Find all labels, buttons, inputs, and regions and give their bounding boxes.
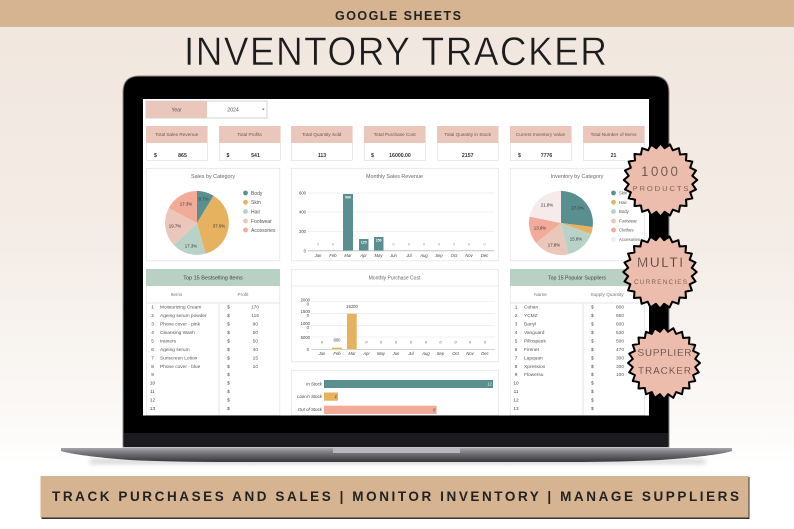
zero labels: 0: [392, 242, 395, 246]
year selector: [146, 101, 267, 118]
month labels: Apr: [362, 351, 370, 356]
legend: inventory: Clothes: [619, 228, 634, 233]
pie chart: sales: [165, 191, 229, 255]
dollar column: $: [591, 372, 594, 378]
month labels: Feb: [333, 351, 341, 356]
panel: inventory by category: [510, 168, 644, 261]
card: total quantity in stock: Total Quantity in Stock: [444, 132, 492, 137]
row numbers: 1: [515, 305, 518, 310]
legend: sales: Hair: [251, 209, 261, 215]
dollar column: $: [227, 364, 230, 370]
zero labels: 0: [321, 340, 324, 344]
row numbers: 3: [151, 322, 154, 327]
zero labels: 0: [410, 340, 413, 344]
legend: inventory: Footwear: [619, 219, 637, 224]
top banner: Google Sheets: GOOGLE SHEETS: [335, 9, 461, 23]
dollar column: $: [227, 330, 230, 336]
legend: inventory: [611, 191, 640, 242]
y axis labels: 600: [299, 190, 307, 196]
panel: stock status bar chart: In Stock: [306, 382, 323, 386]
zero labels: 0: [408, 242, 411, 246]
card: current inventory value: $: [518, 153, 521, 159]
pie chart: sales: 37.0%: [213, 224, 225, 228]
month labels: Oct: [452, 351, 460, 356]
y axis labels: 0: [307, 302, 310, 307]
month labels: Apr: [359, 253, 367, 258]
month labels: Mar: [348, 351, 356, 356]
dollar column: $: [227, 338, 230, 344]
zero labels: 0: [332, 242, 335, 246]
supplier names: Cuhan: [524, 305, 538, 311]
item names: Moisturizing Cream: [160, 305, 201, 311]
KPI cards: [146, 126, 644, 160]
profit values: 170: [251, 305, 259, 311]
row numbers: [150, 305, 155, 411]
zero labels: [321, 340, 487, 344]
row numbers: 6: [151, 347, 154, 352]
legend: inventory: Accesories: [619, 237, 640, 242]
panel: monthly sales revenue: [291, 168, 498, 261]
row numbers: 9: [515, 372, 518, 377]
supplier names: Vanguard: [524, 330, 545, 336]
legend: sales: Skin: [251, 200, 261, 206]
month labels: Jun: [392, 351, 400, 356]
panel: stock status bar chart: Low in Stock: [297, 394, 323, 399]
supplier names: Lapquan: [524, 355, 543, 361]
row numbers: 2: [515, 313, 518, 318]
month labels: Sep: [437, 351, 445, 356]
pie chart: inventory: 21.8%: [541, 202, 553, 208]
card: total sales revenue: Total Sales Revenue: [155, 132, 199, 137]
profit values: [251, 305, 259, 370]
supplier names: Banyl: [524, 322, 536, 328]
month labels: [318, 351, 490, 356]
profit values: 40: [253, 347, 258, 353]
row numbers: 4: [515, 330, 518, 335]
quantity values: 650: [616, 313, 624, 319]
laptop shadow: [90, 459, 705, 464]
row numbers: 6: [515, 347, 518, 352]
dollar column: $: [591, 347, 594, 353]
card: total purchase cost: $: [371, 153, 374, 159]
dollar column: $: [227, 372, 230, 378]
card: current inventory value: Current Inventory Value: [516, 132, 565, 137]
badge: multi currencies: MULTI: [637, 255, 683, 270]
table: top 15 popular suppliers: Supply Quantity: [590, 292, 624, 297]
zero labels: 0: [484, 340, 487, 344]
bars: monthly sales: 590: [345, 196, 351, 200]
dollar column: $: [227, 347, 230, 353]
dollar column: $: [591, 338, 594, 344]
laptop chin: [124, 433, 668, 447]
zero labels: 0: [365, 340, 368, 344]
row numbers: 4: [151, 330, 154, 335]
supplier names: Flowersu: [524, 372, 544, 378]
badge: 1000 products: 1000: [641, 164, 678, 179]
dollar column: $: [591, 381, 594, 387]
panel: monthly sales revenue: Monthly Sales Revenue: [366, 174, 423, 180]
table: top 15 bestselling items: Top 15 Bestselling Items: [183, 276, 243, 282]
card: total number of items: 21: [611, 153, 616, 159]
quantity values: 530: [616, 330, 624, 336]
row numbers: 13: [150, 406, 155, 411]
table: top 15 bestselling items: Profit: [238, 292, 249, 297]
supplier names: Pillospeek: [524, 338, 546, 344]
zero labels: 0: [438, 242, 441, 246]
y axis labels: [299, 190, 307, 253]
card: total sales revenue: $: [154, 153, 157, 159]
dollar column: [591, 305, 594, 412]
table: top 15 bestselling items: Items: [171, 292, 183, 297]
item names: trainers: [160, 338, 177, 344]
pie chart: inventory: 27.0%: [571, 206, 584, 210]
dollar column: $: [227, 389, 230, 395]
item names: Ageing serum: [160, 347, 190, 353]
item names: Phone cover - pink: [160, 322, 201, 328]
dollar column: $: [591, 305, 594, 311]
dollar column: $: [227, 398, 230, 404]
panel: monthly purchase cost: [291, 269, 498, 362]
card: total quantity in stock: [437, 126, 498, 160]
card: total number of items: [583, 126, 644, 160]
profit values: 90: [253, 322, 258, 328]
quantity values: 500: [616, 338, 624, 344]
zero labels: [317, 242, 486, 246]
row numbers: 8: [515, 364, 518, 369]
pie chart: sales: 19.7%: [169, 224, 181, 228]
dollar column: $: [591, 398, 594, 404]
dashboard screen: [143, 99, 649, 416]
row numbers: 9: [151, 372, 154, 377]
y axis labels: 5000: [301, 335, 311, 340]
dollar column: $: [227, 355, 230, 361]
dollar column: $: [227, 381, 230, 387]
quantity values: 600: [616, 322, 624, 328]
y axis labels: 0: [307, 325, 310, 330]
card: total sales revenue: [146, 126, 208, 160]
row numbers: 11: [514, 389, 519, 394]
dollar column: $: [227, 305, 230, 311]
supplier names: [524, 305, 546, 378]
item names: Phone cover - blue: [160, 364, 201, 370]
row numbers: 3: [515, 322, 518, 327]
card: total purchase cost: 16000.00: [389, 153, 411, 159]
y axis labels: 0: [304, 248, 307, 253]
panel: stock status bar chart: Out of Stock: [298, 407, 323, 412]
pie chart: sales: 8.7%: [198, 196, 209, 202]
zero labels: 0: [454, 340, 457, 344]
table: top 15 popular suppliers: [510, 269, 644, 415]
legend: sales: Footwear: [251, 219, 272, 225]
panel: sales by category: [146, 168, 280, 261]
title: INVENTORY TRACKER: [184, 30, 607, 74]
dollar column: $: [591, 355, 594, 361]
table: top 15 popular suppliers: Top 15 Popular Suppliers: [548, 276, 606, 282]
month labels: Jun: [389, 253, 398, 258]
card: total number of items: Total Number of Items: [591, 132, 637, 137]
card: total sales revenue: 865: [178, 153, 187, 159]
badge: supplier tracker: SUPPLIER: [638, 348, 692, 359]
laptop lid: [123, 76, 669, 447]
pie chart: inventory: 15.8%: [570, 236, 582, 242]
card: total quantity sold: 113: [318, 153, 326, 159]
bars: monthly sales: 125: [361, 240, 367, 244]
pie chart: sales: 17.3%: [180, 202, 192, 206]
row numbers: 11: [150, 389, 155, 394]
legend: sales: [243, 191, 276, 234]
table: top 15 bestselling items: [146, 269, 280, 415]
row numbers: 7: [151, 355, 154, 360]
row numbers: 10: [513, 381, 519, 386]
profit values: 50: [253, 338, 258, 344]
dollar column: $: [591, 364, 594, 370]
month labels: Jul: [405, 253, 413, 258]
item names: Ageing serum powder: [160, 313, 207, 319]
bottom banner: features: TRACK PURCHASES AND SALES | MONITOR INVENTORY | MANAGE SUPPLIERS: [52, 489, 739, 504]
row numbers: 2: [151, 313, 154, 318]
year selector: Year: [171, 107, 182, 113]
month labels: Dec: [481, 351, 490, 356]
card: current inventory value: 7776: [541, 153, 552, 159]
card: total profits: [219, 126, 280, 160]
year selector: 2024: [227, 107, 239, 113]
panel: stock status bar chart: [291, 370, 498, 415]
laptop: [61, 76, 732, 464]
panel: stock status bar chart: 8: [433, 408, 436, 412]
card: total quantity sold: Total Quantity Sold: [302, 132, 342, 137]
quantity values: 100: [616, 372, 624, 378]
dollar column: $: [227, 406, 230, 412]
y axis labels: 1000: [301, 321, 311, 326]
zero labels: 0: [469, 340, 472, 344]
quantity values: [616, 305, 624, 378]
card: total profits: $: [227, 153, 230, 159]
zero labels: 0: [380, 340, 383, 344]
month labels: Jan: [318, 351, 326, 356]
y axis labels: 0: [307, 313, 310, 318]
laptop notch: [333, 448, 460, 453]
panel: stock status bar chart: 1: [335, 394, 337, 399]
quantity values: 800: [616, 305, 624, 311]
top banner: Google Sheets: [0, 0, 794, 27]
badge: 1000 products: [624, 143, 697, 217]
dollar column: $: [591, 389, 594, 395]
profit values: 116: [251, 313, 259, 319]
panel: sales by category: Sales by Category: [191, 174, 235, 180]
row numbers: 5: [515, 338, 518, 344]
month labels: May: [375, 253, 383, 258]
pie chart: sales: 17.3%: [185, 244, 197, 248]
zero labels: 0: [425, 340, 428, 344]
badge: supplier tracker: TRACKER: [638, 366, 691, 377]
badge: supplier tracker: [628, 327, 700, 399]
y axis labels: 1500: [301, 309, 311, 314]
supplier names: Xpression: [524, 364, 546, 370]
badge: multi currencies: CURRENCIES: [634, 279, 687, 286]
card: total purchase cost: Total Purchase Cost: [374, 132, 416, 137]
y axis labels: 400: [299, 210, 307, 214]
item names: [160, 305, 207, 370]
card: current inventory value: [510, 126, 572, 160]
y axis labels: 200: [299, 229, 307, 234]
row numbers: 12: [513, 398, 519, 402]
row numbers: 13: [513, 406, 519, 411]
row numbers: [513, 305, 519, 411]
pie chart: inventory: 17.8%: [548, 242, 560, 248]
card: total profits: Total Profits: [237, 132, 262, 137]
month labels: Nov: [466, 351, 475, 356]
badge: multi currencies: [623, 235, 697, 309]
legend: inventory: Body: [619, 209, 630, 214]
row numbers: 12: [150, 398, 155, 402]
zero labels: 0: [423, 242, 426, 246]
month labels: Nov: [465, 253, 474, 258]
y axis labels: 2000: [301, 297, 311, 302]
month labels: Feb: [329, 253, 337, 258]
month labels: Dec: [481, 253, 489, 258]
item names: Cleansing Wash: [160, 330, 195, 336]
card: total purchase cost: [364, 126, 426, 160]
legend: sales: Body: [251, 191, 263, 197]
month labels: Aug: [421, 351, 430, 356]
legend: sales: Accesories: [251, 228, 276, 234]
month labels: Jul: [407, 351, 415, 356]
row numbers: 8: [151, 364, 154, 369]
row numbers: 7: [515, 355, 518, 360]
quantity values: 300: [616, 355, 624, 361]
month labels: Jan: [314, 253, 322, 258]
pie chart: inventory: [529, 191, 593, 255]
zero labels: 0: [317, 242, 320, 246]
month labels: Sep: [435, 253, 443, 258]
bottom banner: features: [40, 476, 750, 519]
bars: purchase cost: 800: [334, 338, 341, 342]
pie chart: inventory: 13.9%: [534, 226, 546, 230]
zero labels: 0: [439, 340, 442, 344]
zero labels: 0: [395, 340, 398, 344]
bars: monthly sales: [343, 194, 384, 250]
bars: monthly sales: 150: [376, 238, 382, 242]
month labels: Oct: [451, 253, 458, 258]
zero labels: 0: [483, 242, 486, 246]
month labels: Aug: [419, 253, 428, 258]
quantity values: 300: [616, 364, 624, 370]
month labels: Mar: [344, 253, 352, 258]
supplier names: YCMZ: [524, 313, 538, 319]
card: total quantity in stock: 2157: [462, 153, 474, 159]
supplier names: Firenet: [524, 347, 540, 353]
bars: purchase cost: [332, 304, 358, 349]
zero labels: 0: [468, 242, 471, 246]
dollar column: $: [591, 330, 594, 336]
card: total profits: 541: [251, 153, 260, 159]
panel: stock status bar chart: 12: [487, 382, 493, 387]
row numbers: 1: [151, 305, 154, 310]
row numbers: 10: [150, 381, 155, 386]
quantity values: 470: [616, 347, 624, 353]
legend: inventory: Skin: [619, 191, 628, 196]
card: total quantity sold: [291, 126, 352, 160]
profit values: 50: [253, 330, 258, 336]
legend: inventory: Hair: [619, 200, 627, 205]
dollar column: $: [591, 313, 594, 319]
bars: purchase cost: 15200: [346, 304, 358, 309]
panel: inventory by category: Inventory by Category: [551, 174, 604, 180]
profit values: 15: [253, 355, 258, 361]
zero labels: 0: [453, 242, 456, 246]
table: top 15 popular suppliers: Name: [534, 292, 547, 297]
dollar column: $: [227, 313, 230, 319]
profit values: 10: [253, 364, 258, 370]
month labels: [314, 253, 489, 258]
month labels: May: [377, 351, 386, 356]
item names: Sunscreen Lotion: [160, 355, 198, 361]
panel: monthly purchase cost: Monthly Purchase Cost: [369, 276, 421, 282]
dollar column: [227, 305, 230, 412]
dollar column: $: [591, 406, 594, 412]
badge: 1000 products: PRODUCTS: [632, 184, 688, 193]
laptop base: [61, 448, 732, 462]
row numbers: 5: [151, 338, 154, 344]
dollar column: $: [591, 322, 594, 328]
dollar column: $: [227, 322, 230, 328]
y axis labels: 0: [307, 347, 310, 352]
y axis labels: [301, 297, 311, 352]
